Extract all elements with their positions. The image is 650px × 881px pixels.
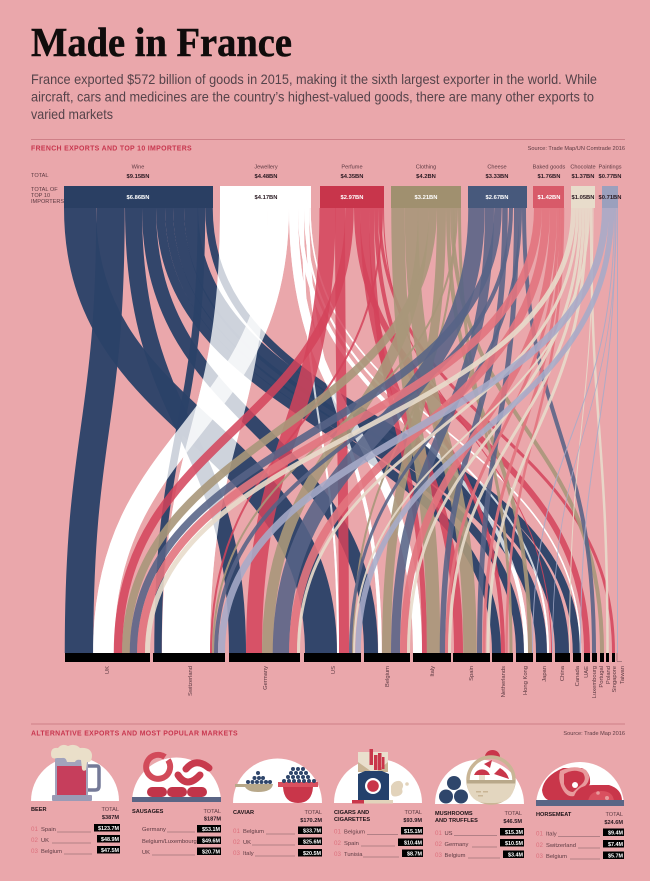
text: caviar: $170.2M [300, 818, 322, 824]
text: horsemeat: $5.7M [608, 854, 624, 860]
product names and totals: $1.76BN [538, 174, 560, 180]
product names and totals: Jewellery [254, 164, 278, 170]
text: cigars: $15.1M [404, 829, 423, 835]
panel: caviar [233, 759, 322, 857]
text: caviar: TOTAL [304, 810, 322, 816]
text: sausages: $187M [204, 816, 221, 822]
text: mushrooms: 01 [435, 830, 442, 837]
importer labels: UK [105, 666, 111, 674]
text: mushrooms [435, 811, 524, 859]
text: caviar: UK [243, 840, 251, 846]
text: cigars: 03 [334, 851, 341, 858]
importer labels: Portugal [599, 666, 605, 688]
text: beer: $48.9M [101, 837, 120, 843]
text: cigars: Tunisia [344, 852, 363, 858]
text: sausages: SAUSAGES [132, 809, 164, 815]
text: sausages: TOTAL [203, 809, 221, 815]
panel: mushrooms and truffles [435, 750, 524, 859]
text: mushrooms: $15.3M [505, 830, 524, 836]
text: beer: 03 [31, 848, 38, 855]
text: mushrooms: $10.5M [505, 841, 524, 847]
importer labels: Singapore [612, 666, 618, 692]
source note: Source: Trade Map 2016 [563, 731, 625, 737]
text: mushrooms: $3.4M [508, 852, 524, 858]
text: horsemeat: TOTAL [605, 812, 623, 818]
importer labels: Belgium [385, 666, 391, 687]
importer labels: Luxembourg [592, 666, 598, 698]
sankey flows [79, 208, 618, 653]
importer labels: Hong Kong [523, 666, 529, 695]
text: beer: $123.7M [98, 826, 120, 832]
product names and totals: Paintings [598, 164, 622, 170]
text: caviar: 02 [233, 839, 240, 846]
text: caviar: 01 [233, 828, 240, 835]
row labels: IMPORTERS [31, 199, 64, 205]
product names and totals: Clothing [416, 164, 436, 170]
row labels: TOP 10 [31, 193, 50, 199]
text: cigars [334, 810, 423, 858]
product names and totals: $0.77BN [599, 174, 621, 180]
header bars: top 10 importer totals: $2.67BN [486, 195, 508, 201]
importer labels: Canada [575, 665, 581, 686]
product names and totals: Cheese [487, 164, 507, 170]
text: cigars: CIGARETTES [334, 817, 370, 823]
text: mushrooms: MUSHROOMS [435, 811, 473, 817]
icon: mushroom basket [435, 750, 524, 804]
text: horsemeat: 02 [536, 842, 543, 849]
text: horsemeat: $7.4M [608, 842, 624, 848]
header bars: top 10 importer totals: $1.42BN [538, 195, 560, 201]
product names and totals: $4.48BN [255, 174, 277, 180]
text: horsemeat: Italy [546, 832, 557, 838]
text: beer [31, 807, 120, 855]
text: cigars: Spain [344, 841, 359, 847]
text: horsemeat: Switzerland [546, 843, 576, 849]
text: sausages: $20.7M [202, 850, 221, 856]
panel: cigars and cigarettes [334, 749, 423, 858]
product names and totals: Wine [132, 164, 144, 170]
text: beer: UK [41, 838, 49, 844]
text: caviar: 03 [233, 850, 240, 857]
jewellery flows [104, 208, 580, 653]
text: mushrooms: AND TRUFFLES [435, 818, 478, 824]
heading: french exports: FRENCH EXPORTS AND TOP 10 IMPORTERS [31, 144, 192, 152]
cheese flows [134, 208, 594, 653]
text: cigars: TOTAL [404, 810, 422, 816]
heading: alternative exports: ALTERNATIVE EXPORTS AND MOST POPULAR MARKETS [31, 728, 238, 738]
text: mushrooms: TOTAL [504, 811, 522, 817]
text: beer: $387M [102, 815, 119, 821]
text: beer: 01 [31, 826, 38, 833]
text: caviar: $25.6M [303, 840, 322, 846]
text: beer: 02 [31, 837, 38, 844]
icon: horsemeat cuts [536, 762, 624, 806]
text: beer: Spain [41, 827, 56, 833]
text: horsemeat [536, 812, 624, 860]
text: cigars: $93.9M [403, 818, 422, 824]
intro text: aircraft, cars and medicines are the country’s highest-valued goods, there are many other exports to [31, 90, 594, 104]
text: cigars: $8.7M [407, 852, 423, 858]
text: horsemeat: $9.4M [608, 830, 624, 836]
header bars: top 10 importer totals: $4.17BN [255, 195, 277, 201]
white flows base layer [104, 208, 580, 653]
text: sausages: Belgium/Luxembourg [142, 839, 197, 845]
text: mushrooms: 03 [435, 852, 442, 859]
text: caviar: $33.7M [303, 828, 322, 834]
text: cigars: 02 [334, 840, 341, 847]
row labels: TOTAL [31, 173, 49, 179]
panel: sausages [132, 755, 221, 856]
clothing flows [126, 208, 602, 653]
text: sausages: UK [142, 850, 150, 856]
text: sausages: Germany [142, 827, 166, 833]
header bars: top 10 importer totals: $2.97BN [341, 195, 363, 201]
text: horsemeat: 01 [536, 830, 543, 838]
source note: Source: Trade Map/UN Comtrade 2016 [528, 146, 625, 152]
product names and totals: $3.33BN [486, 174, 508, 180]
product names and totals: $1.37BN [572, 174, 594, 180]
importer labels: China [560, 665, 566, 681]
importer labels: Poland [606, 666, 612, 684]
header bars: top 10 importer totals: $6.86BN [127, 195, 149, 201]
text: cigars: CIGARS AND [334, 810, 369, 816]
product names and totals: $9.15BN [127, 174, 149, 180]
text: mushrooms: US [444, 831, 453, 837]
product names and totals [127, 164, 622, 180]
icon: beer mug [31, 745, 119, 801]
text: mushrooms: $46.5M [503, 819, 522, 825]
wine flows [79, 208, 576, 653]
text: caviar [233, 810, 322, 857]
panel: horsemeat [536, 762, 624, 860]
text: mushrooms: Germany [444, 842, 468, 848]
importer labels: Switzerland [188, 666, 194, 696]
text: beer: Belgium [41, 849, 62, 855]
product names and totals: $4.2BN [416, 174, 436, 180]
text: sausages: $53.1M [202, 827, 221, 833]
product names and totals: Chocolate [570, 164, 596, 170]
text: caviar: $20.5M [303, 851, 322, 857]
importer labels [105, 665, 626, 698]
text: mushrooms: 02 [435, 841, 442, 848]
intro text: France exported $572 billion of goods in 2015, making it the sixth largest exporter in the world. While [31, 72, 597, 87]
header bars: top 10 importer totals: $3.21BN [415, 195, 437, 201]
text: horsemeat: 03 [536, 853, 543, 860]
text: horsemeat: Belgium [546, 854, 567, 860]
text: horsemeat: HORSEMEAT [536, 812, 572, 818]
row labels: TOTAL OF [31, 187, 58, 193]
text: beer: $47.5M [101, 848, 120, 854]
perfume flows [118, 208, 614, 653]
text: cigars: Belgium [344, 830, 365, 836]
text: cigars: $10.4M [404, 840, 423, 846]
importer labels: Germany [263, 666, 269, 690]
paintings flows [222, 208, 618, 653]
icon: caviar bowl and spoon [233, 759, 322, 803]
product names and totals: $4.35BN [341, 174, 363, 180]
importer labels: Italy [430, 666, 436, 677]
product names and totals: Baked goods [533, 164, 566, 170]
header bars: top 10 importer totals: $1.05BN [572, 195, 594, 201]
importer bars [65, 653, 615, 662]
text: caviar: CAVIAR [233, 810, 254, 816]
importer labels: Spain [469, 666, 475, 681]
text: beer: TOTAL [101, 807, 119, 813]
title: Made in France [31, 19, 292, 65]
importer labels: US [331, 666, 337, 674]
importer labels: Japan [542, 666, 548, 682]
header bars: top 10 importer totals: $0.71BN [599, 195, 621, 201]
text: cigars: 01 [334, 828, 341, 836]
importer labels: Netherlands [501, 666, 507, 697]
intro text [31, 72, 597, 122]
row labels [31, 173, 64, 205]
text: mushrooms: Belgium [444, 853, 466, 859]
text: horsemeat: $24.6M [604, 820, 623, 826]
text: caviar: Italy [243, 851, 254, 857]
header bars: top 10 importer totals [64, 186, 621, 208]
icon: sausages [132, 755, 221, 802]
chocolate flows [148, 208, 608, 653]
importer labels: UAE [584, 666, 590, 678]
text: sausages: $49.6M [202, 838, 221, 844]
text: sausages [132, 809, 221, 856]
intro text: varied markets [31, 107, 113, 122]
panel: beer [31, 745, 120, 855]
text: caviar: Belgium [243, 829, 264, 835]
text: beer: BEER [31, 807, 47, 813]
product names and totals: Perfume [341, 164, 363, 170]
importer labels: Taiwan [620, 666, 626, 684]
icon: cigarette pack [334, 749, 422, 804]
baked goods flows [141, 208, 563, 653]
